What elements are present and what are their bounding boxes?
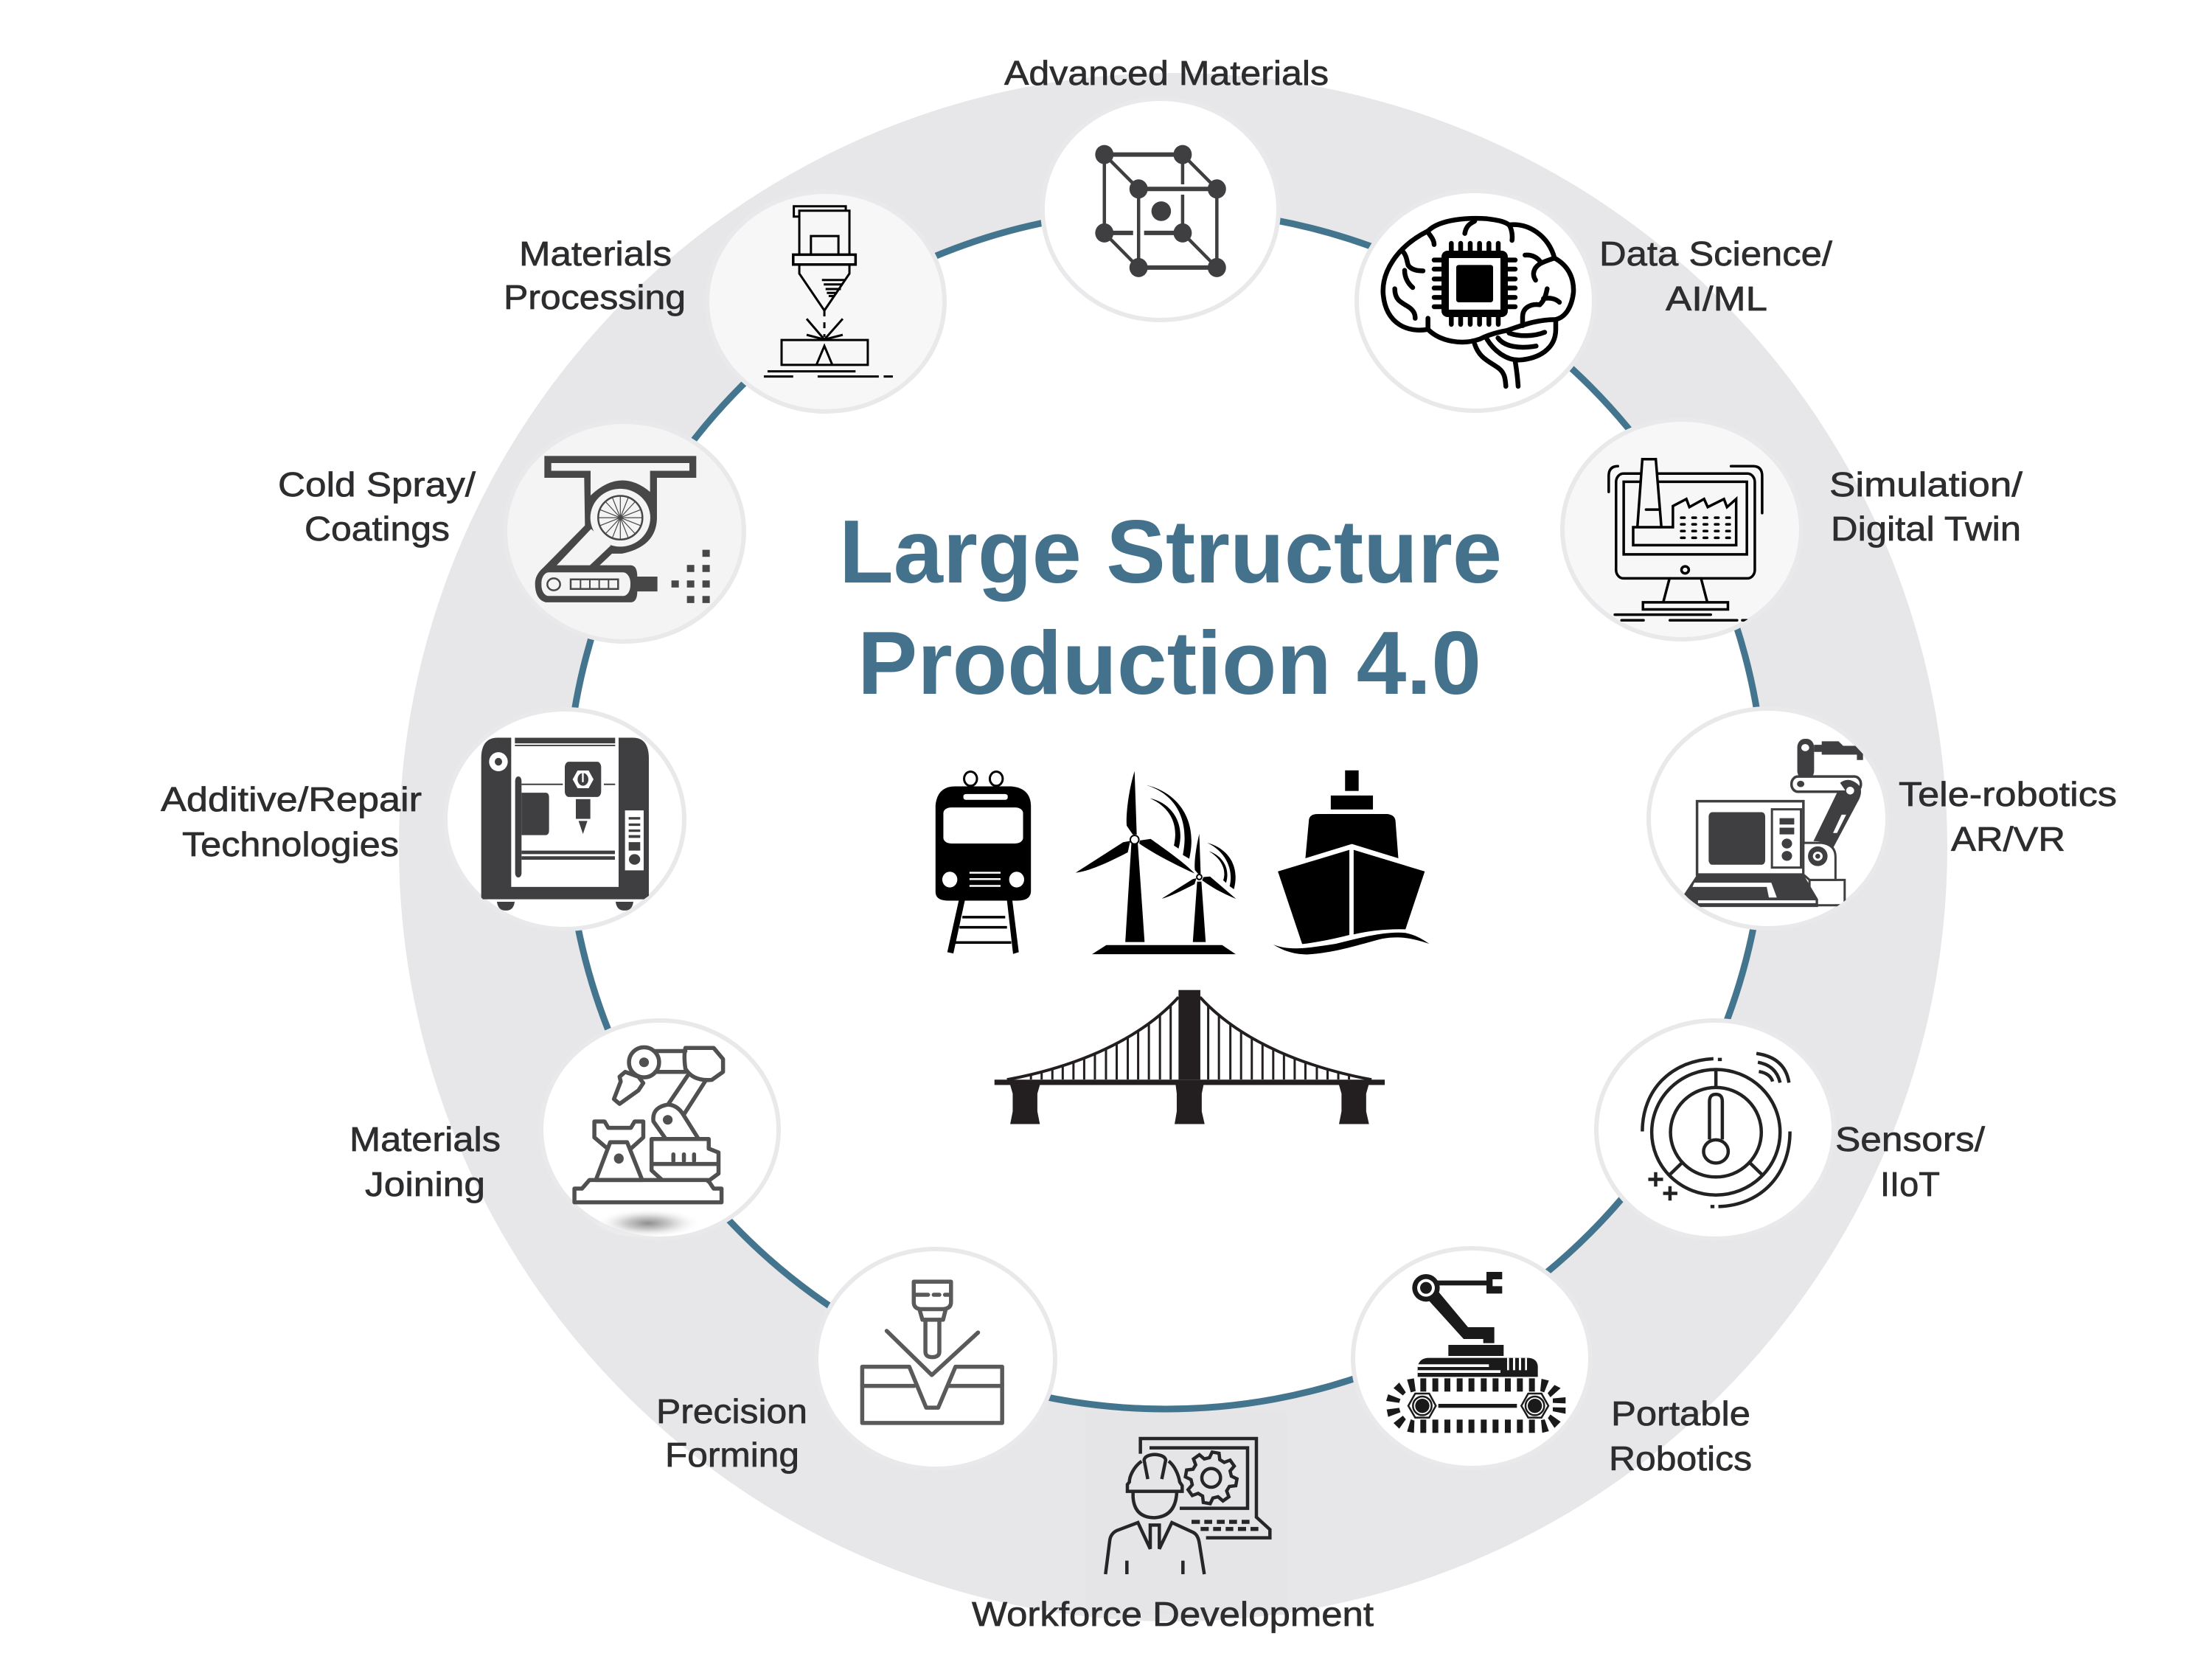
node circle bbox=[541, 1020, 779, 1239]
node circle bbox=[1043, 99, 1279, 320]
node: Precision Forming bbox=[656, 1249, 1055, 1474]
icon: 3D printer bbox=[481, 738, 649, 911]
label: Advanced Materials bbox=[1004, 54, 1329, 92]
node: Precision Forming: Forming bbox=[665, 1436, 799, 1474]
icon: laser head bbox=[764, 206, 893, 377]
title: Large Structure bbox=[839, 501, 1502, 602]
icon: ship bbox=[1273, 771, 1430, 954]
icon: suspension bridge bbox=[995, 990, 1385, 1124]
icon: factory on monitor bbox=[1609, 459, 1762, 620]
node circle bbox=[1562, 420, 1801, 639]
title bbox=[839, 501, 1502, 713]
label: Cold Spray/ bbox=[278, 465, 476, 504]
label: Tele-robotics bbox=[1899, 775, 2117, 813]
node circle bbox=[1649, 709, 1888, 928]
node: Additive/Repair: Technologies bbox=[182, 825, 399, 863]
node: Data Science bbox=[1357, 191, 1832, 411]
node: Workforce Development bbox=[972, 1439, 1374, 1633]
icon: engineer with computer bbox=[1105, 1439, 1270, 1574]
node: Materials Joining bbox=[349, 1020, 779, 1239]
node circle bbox=[1357, 191, 1594, 411]
label: Precision bbox=[656, 1392, 807, 1430]
node: Materials Processing bbox=[504, 192, 945, 411]
icon: tracked robot bbox=[1386, 1272, 1565, 1433]
label: Portable bbox=[1611, 1394, 1750, 1433]
node: Additive/Repair bbox=[161, 709, 684, 929]
icon: press brake bbox=[862, 1281, 1002, 1423]
node: Cold Spray bbox=[278, 422, 744, 641]
title: Production 4.0 bbox=[858, 613, 1481, 713]
icon: cold spray gun bbox=[535, 456, 710, 603]
node: Cold Spray: Coatings bbox=[305, 509, 450, 548]
icon: welding robot bbox=[574, 1047, 723, 1203]
node: Sensors bbox=[1596, 1020, 1985, 1239]
node: Tele-robotics bbox=[1649, 709, 2117, 928]
node: Materials Joining: Joining bbox=[365, 1165, 485, 1203]
label: Data Science/ bbox=[1599, 234, 1832, 273]
label: Materials bbox=[349, 1120, 501, 1158]
node circle bbox=[1353, 1248, 1590, 1468]
label: Sensors/ bbox=[1835, 1120, 1985, 1158]
node: Tele-robotics: AR/VR bbox=[1951, 820, 2065, 858]
grey outer ring bbox=[399, 73, 1947, 1621]
label: Workforce Development bbox=[972, 1595, 1374, 1633]
node: Simulation: Digital Twin bbox=[1831, 509, 2021, 548]
node circle bbox=[505, 422, 744, 641]
workforce backdrop panel bbox=[1085, 1412, 1287, 1615]
icon: robot arm with computer bbox=[1684, 739, 1863, 907]
node: Portable Robotics bbox=[1353, 1248, 1752, 1478]
node: Data Science: AI/ML bbox=[1666, 279, 1767, 318]
node circle bbox=[445, 709, 684, 929]
blue inner ring bbox=[566, 210, 1765, 1409]
node circle bbox=[816, 1249, 1055, 1469]
label: Additive/Repair bbox=[161, 780, 422, 818]
node circle bbox=[1596, 1020, 1834, 1239]
icon: brain with chip bbox=[1383, 218, 1573, 386]
icon: thermometer sensor bbox=[1642, 1054, 1790, 1206]
node: Materials Processing: Processing bbox=[504, 278, 686, 316]
node: Sensors: IIoT bbox=[1880, 1165, 1940, 1203]
node circle bbox=[707, 192, 945, 411]
node: Advanced Materials bbox=[1004, 54, 1329, 320]
node: Simulation bbox=[1562, 420, 2023, 639]
icon: train bbox=[936, 772, 1031, 954]
icon: wind turbines bbox=[1076, 771, 1236, 954]
icon: shadow bbox=[595, 1208, 701, 1238]
label: Materials bbox=[519, 234, 672, 273]
label: Simulation/ bbox=[1829, 465, 2023, 504]
node: Portable Robotics: Robotics bbox=[1609, 1439, 1752, 1478]
icon: crystal lattice cube bbox=[1095, 145, 1226, 277]
